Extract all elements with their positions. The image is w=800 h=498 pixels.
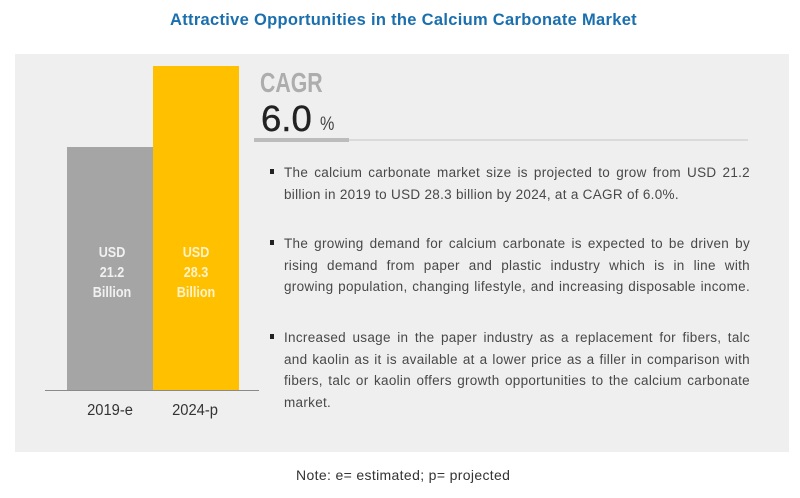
bar label: USD 28.3 Billion: Billion bbox=[177, 284, 215, 301]
text block 3: fibers, talc or kaolin offers growth opportunities to the calcium carbonate bbox=[284, 373, 750, 388]
bar label: USD 21.2 Billion: Billion bbox=[93, 284, 131, 301]
bar label: USD 21.2 Billion bbox=[93, 244, 131, 301]
CAGR percent sign: % bbox=[320, 114, 334, 135]
bar: 2019-e bbox=[67, 147, 153, 390]
chart baseline bbox=[45, 390, 259, 391]
text block 2: rising demand from paper and plastic industry which is in line with bbox=[284, 258, 750, 272]
text block 3: Increased usage in the paper industry as a replacement for fibers, talc bbox=[284, 330, 750, 345]
bar label: USD 21.2 Billion: 21.2 bbox=[100, 264, 124, 281]
bar label: USD 21.2 Billion: USD bbox=[99, 244, 125, 261]
bullet 2 bbox=[270, 240, 274, 245]
text block 3: and kaolin as it is available at a lower price as a filler in comparison with bbox=[284, 352, 750, 366]
bar label: USD 28.3 Billion: 28.3 bbox=[184, 264, 208, 281]
text block 1: billion in 2019 to USD 28.3 billion by 2024, at a CAGR of 6.0%. bbox=[284, 186, 679, 202]
axis label: 2019-e: 2019-e bbox=[87, 402, 133, 419]
axis label: 2024-p: 2024-p bbox=[172, 402, 218, 419]
CAGR label: CAGR bbox=[260, 67, 323, 98]
text block 2: growing population, changing lifestyle, and increasing disposable income. bbox=[284, 279, 750, 294]
text block 2 bbox=[284, 236, 750, 294]
note: Note: e= estimated; p= projected bbox=[296, 467, 510, 483]
bullet 1 bbox=[270, 169, 274, 174]
title: Attractive Opportunities in the Calcium Carbonate Market bbox=[170, 11, 637, 29]
bar label: USD 28.3 Billion bbox=[177, 244, 215, 301]
text block 1: The calcium carbonate market size is projected to grow from USD 21.2 bbox=[284, 165, 750, 180]
CAGR value: 6.0 bbox=[261, 98, 312, 139]
bar label: USD 28.3 Billion: USD bbox=[183, 244, 209, 261]
bar: 2024-p bbox=[153, 66, 239, 390]
CAGR divider bbox=[254, 138, 748, 142]
bullet 3 bbox=[270, 334, 274, 339]
text block 2: The growing demand for calcium carbonate is expected to be driven by bbox=[284, 236, 750, 251]
text block 1 bbox=[284, 165, 750, 202]
panel: background bbox=[15, 54, 789, 452]
text block 3 bbox=[284, 330, 750, 410]
text block 3: market. bbox=[284, 394, 331, 410]
